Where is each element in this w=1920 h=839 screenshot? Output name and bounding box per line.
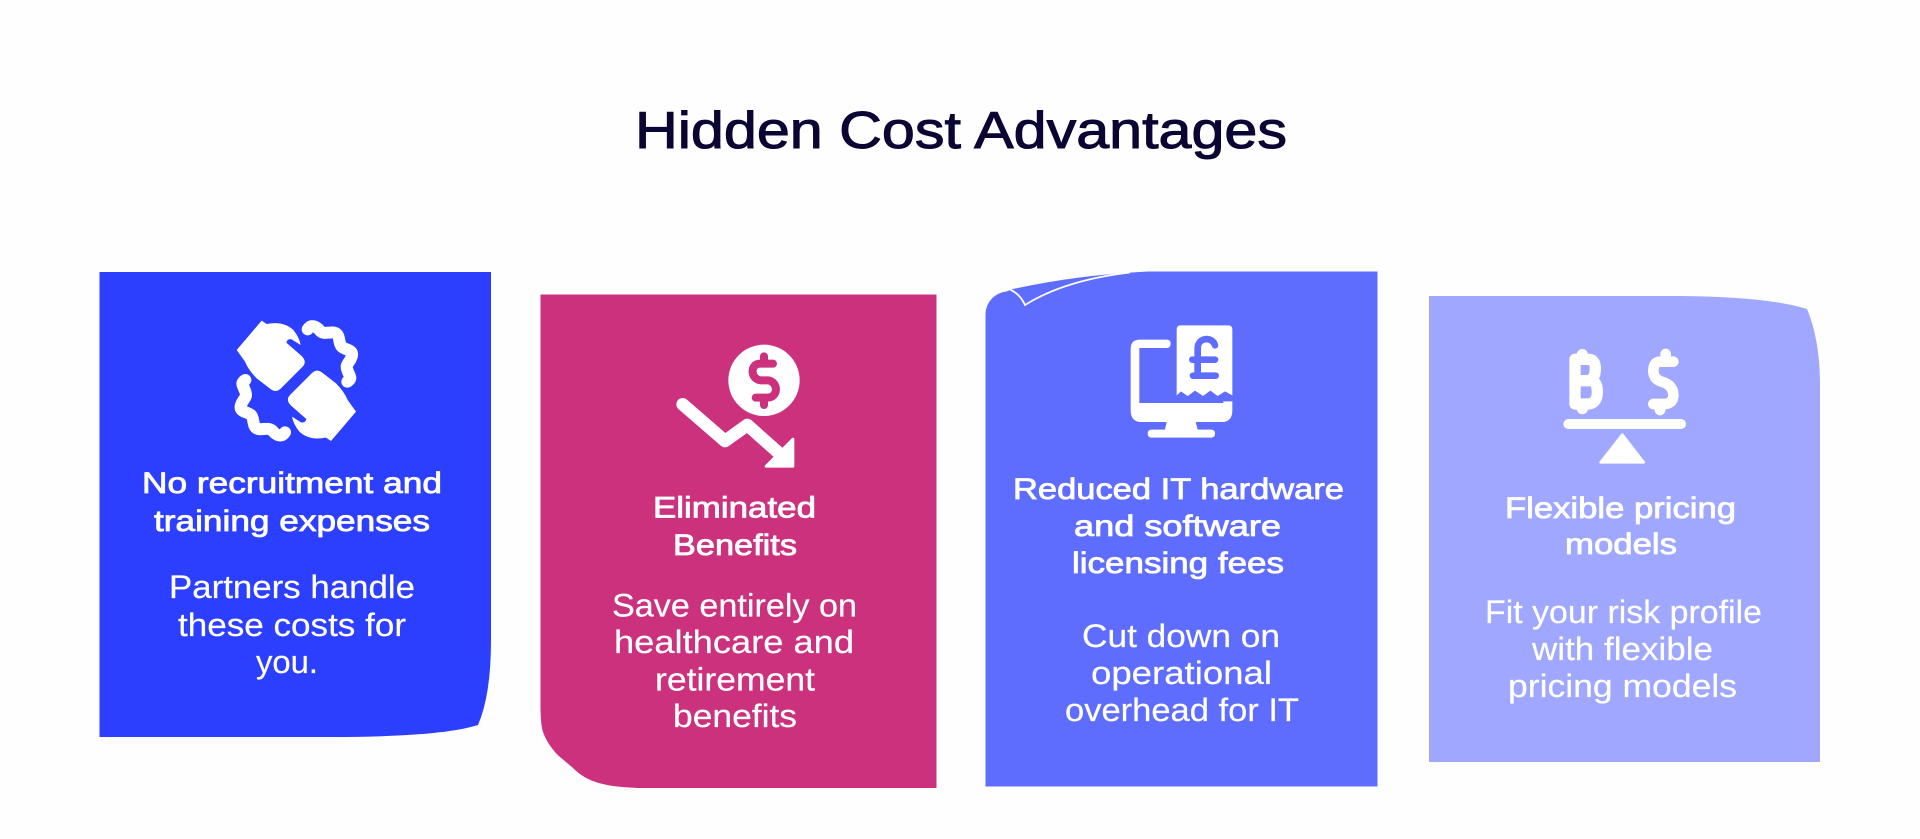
heading: models [1565,528,1677,561]
body text [612,588,857,734]
heading: Eliminated [653,492,816,524]
card background [540,294,936,788]
body text: with flexible [1531,631,1713,667]
icon: monitor with pound receipt [1131,325,1232,438]
icon: handshake [237,321,356,441]
heading: licensing fees [1072,547,1284,580]
body text [1065,618,1299,728]
body text: Fit your risk profile [1485,594,1762,630]
body text: Partners handle [169,569,415,605]
card background [986,272,1378,786]
heading: Flexible pricing [1505,492,1736,525]
panel: flexible pricing [1429,296,1820,762]
body text: Save entirely on [612,588,857,624]
icon: dollar with falling arrow [683,345,800,466]
body text: you. [256,644,318,680]
heading [1505,492,1736,561]
body text: benefits [673,698,797,734]
heading: Benefits [673,529,797,562]
panel: no recruitment [100,272,491,737]
heading: No recruitment and [142,467,442,500]
body text: operational [1091,655,1272,691]
body text: these costs for [178,607,406,643]
heading: Reduced IT hardware [1013,473,1344,506]
body text [169,569,415,680]
title: Hidden Cost Advantages [635,102,1287,160]
icon: currency balance [1563,354,1686,462]
panel: eliminated benefits [540,294,936,788]
body text: pricing models [1508,668,1737,704]
card background [100,272,491,737]
body text: retirement [655,662,815,698]
heading: and software [1074,510,1281,543]
heading [653,492,816,562]
panel: reduced IT fees [986,272,1378,786]
body text [1485,594,1762,704]
body text: overhead for IT [1065,692,1299,728]
heading [1013,473,1344,580]
heading: training expenses [154,505,430,538]
card background [1429,296,1820,762]
heading [142,467,442,538]
body text: Cut down on [1082,618,1280,654]
body text: healthcare and [614,624,854,660]
page curl line [1010,272,1130,305]
